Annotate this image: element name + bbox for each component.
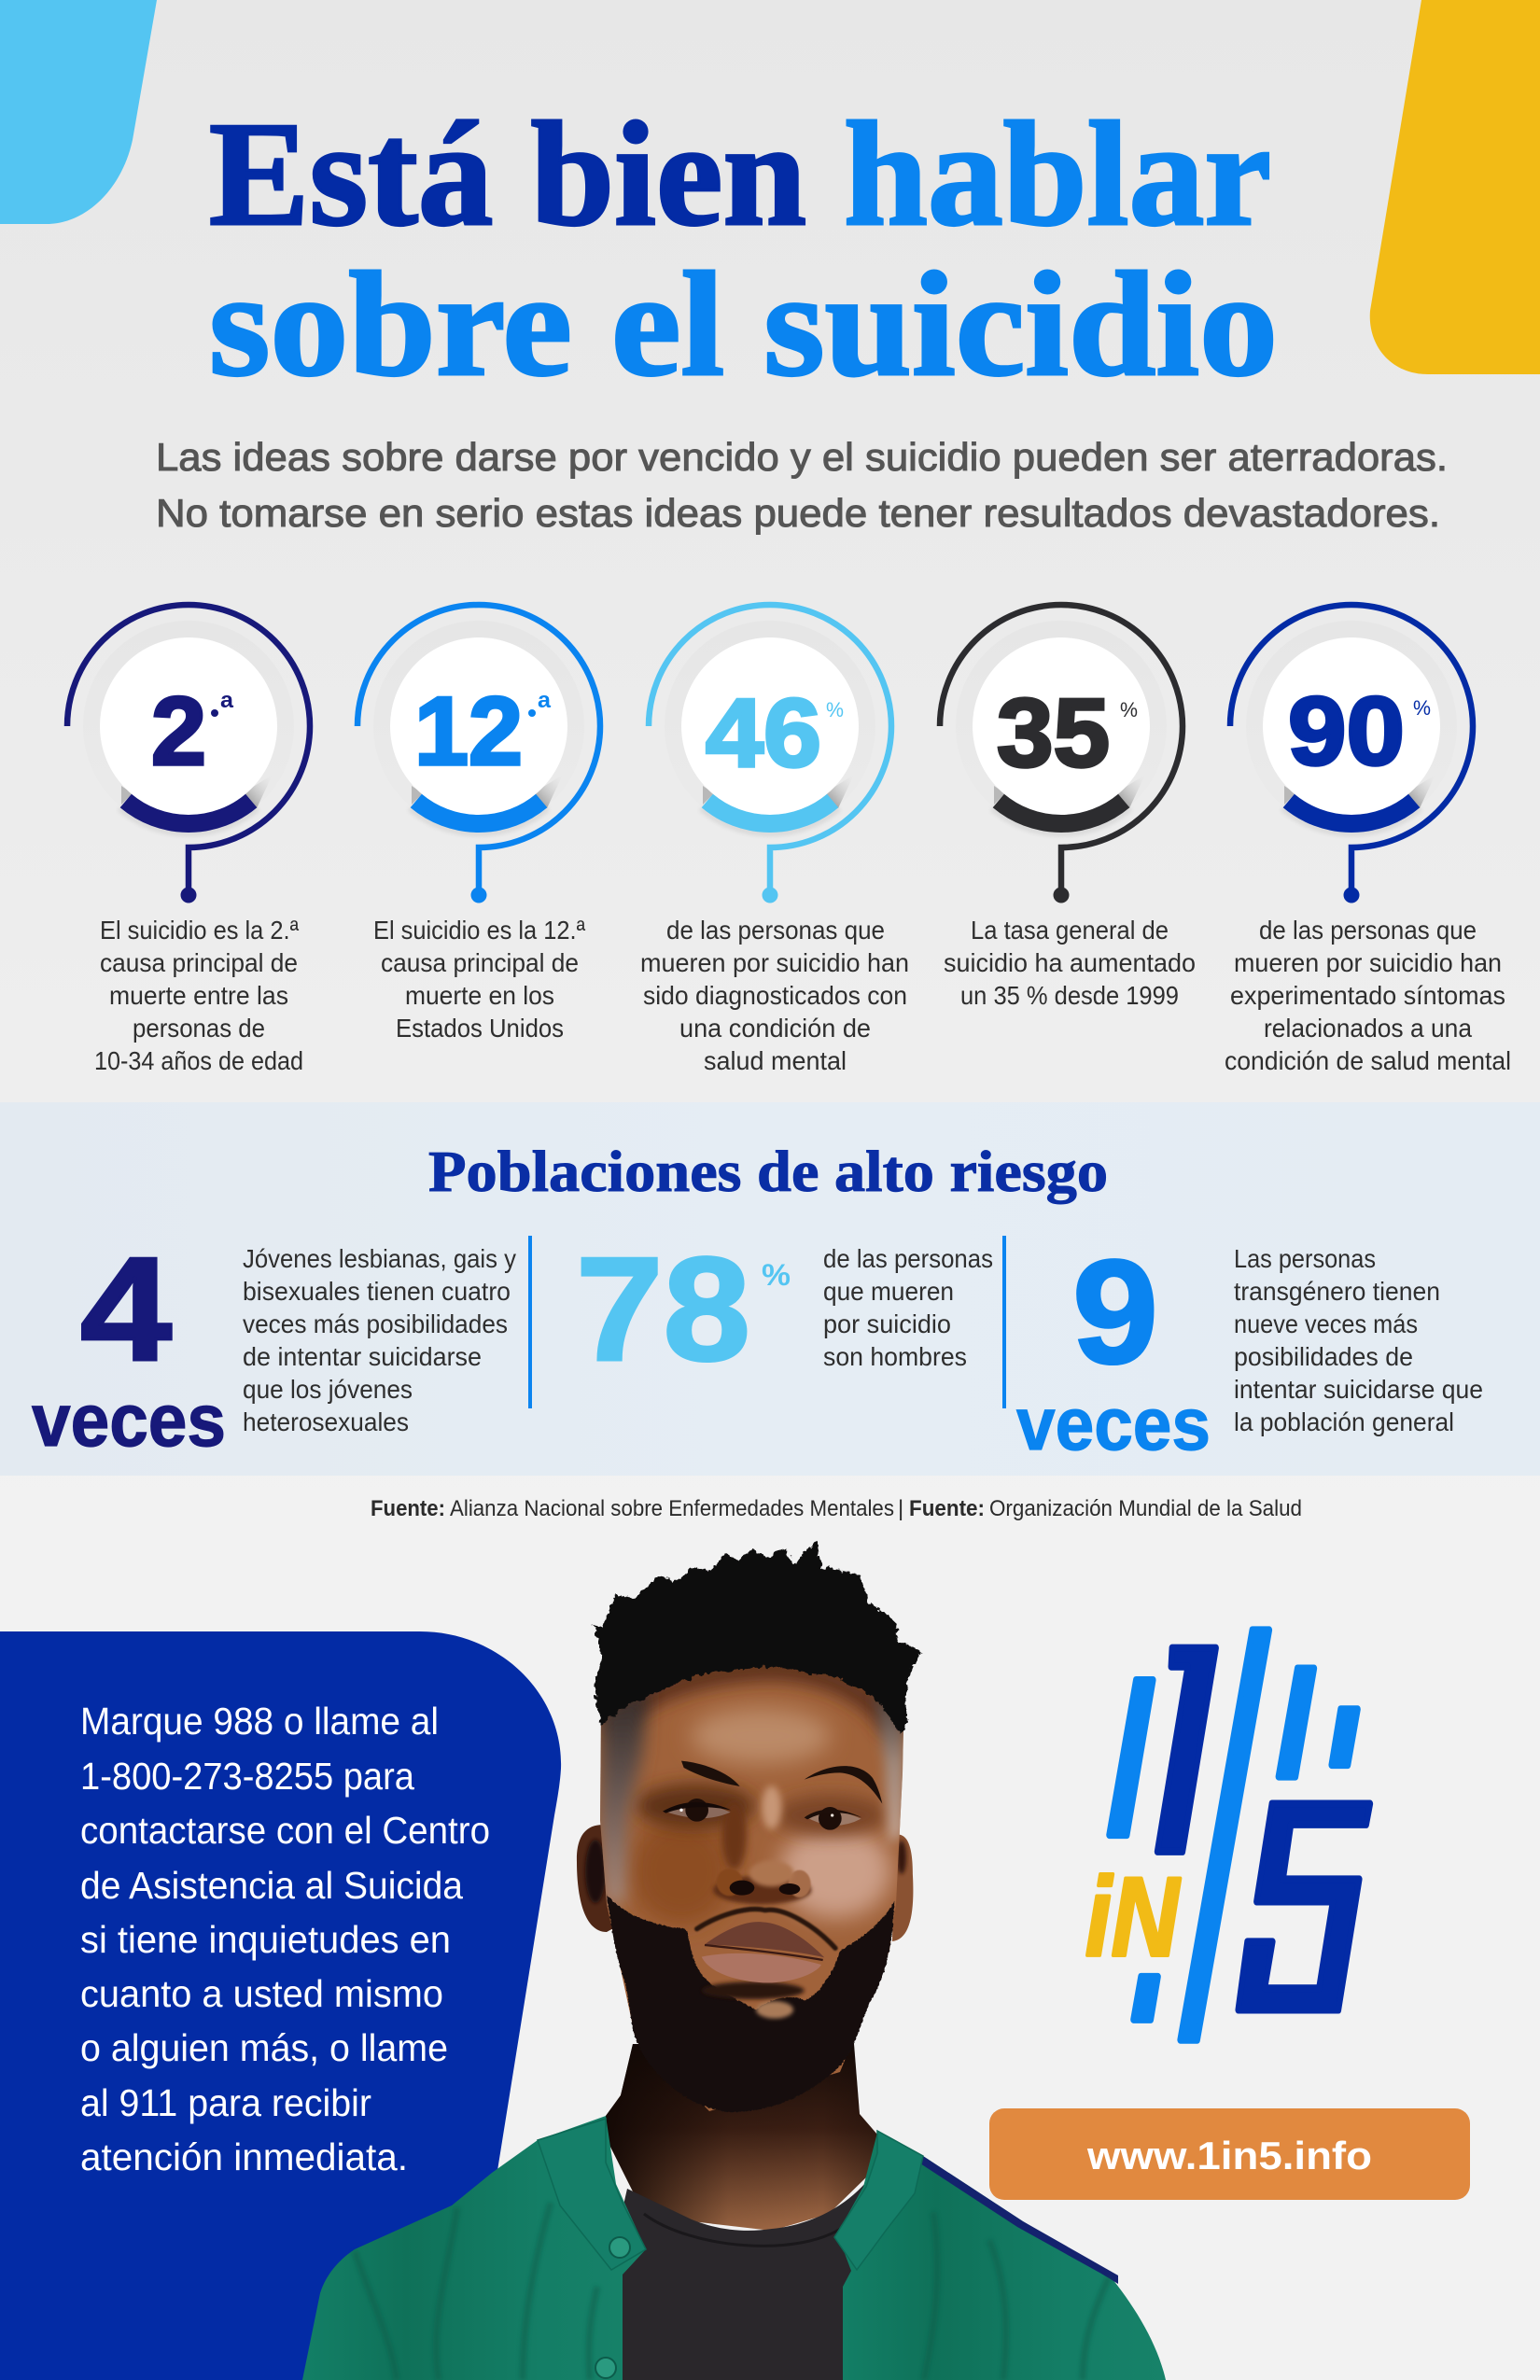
sources [371, 1496, 1302, 1521]
stat: 78 %: 78 [576, 1227, 750, 1392]
illustration: portrait of a man [302, 1543, 1166, 2380]
text: 9 veces [1234, 1244, 1483, 1436]
sources: | [898, 1496, 903, 1521]
gauge: 12.ª [357, 605, 600, 903]
caption: 35 %: La tasa general de [971, 916, 1169, 945]
sources: Fuente: [371, 1496, 445, 1521]
caption: 12.ª [373, 916, 586, 1043]
stat: 9 veces: veces [1016, 1382, 1211, 1465]
text: helpline: atención inmediata. [80, 2135, 408, 2178]
stat: 9 veces: 9 [1072, 1230, 1158, 1394]
text: 4 veces: bisexuales tienen cuatro [243, 1277, 511, 1306]
text: helpline: cuanto a usted mismo [80, 1972, 443, 2015]
head [600, 1665, 903, 2111]
subtitle [156, 435, 1448, 535]
stat: 2.ª [67, 605, 310, 1075]
stat: 12.ª [357, 605, 600, 1043]
jacket: right [837, 2133, 1166, 2380]
text: 4 veces: heterosexuales [243, 1407, 409, 1436]
text: 78 %: son hombres [823, 1342, 967, 1371]
caption: 90 %: mueren por suicidio han [1234, 948, 1502, 977]
caption: 46 % [640, 916, 909, 1075]
caption: 2.ª: muerte entre las [109, 981, 288, 1010]
ears [577, 1825, 913, 1941]
hair [593, 1543, 921, 1733]
stat: 90 % [1225, 605, 1511, 1075]
stat: 4 veces: 4 [80, 1227, 172, 1392]
eyebrows [681, 1761, 882, 1804]
number: 46 %: % [826, 698, 844, 721]
eyes [663, 1799, 861, 1830]
panel: high risk populations [0, 1102, 1540, 1476]
text: 78 %: de las personas [823, 1244, 993, 1273]
button: website: www.1in5.info [1086, 2134, 1372, 2177]
caption: 90 %: condición de salud mental [1225, 1046, 1511, 1075]
text: 78 %: por suicidio [823, 1309, 951, 1338]
subtitle: No tomarse en serio estas ideas puede tener resultados devastadores. [156, 491, 1440, 535]
caption: 35 %: un 35 % desde 1999 [960, 981, 1179, 1010]
caption: 12.ª: causa principal de [381, 948, 579, 977]
decoration: yellow corner shape [1370, 0, 1540, 374]
jacket collars [538, 2119, 923, 2270]
text: 4 veces [243, 1244, 516, 1436]
panel: helpline [0, 1631, 561, 2380]
caption: 2.ª [94, 916, 303, 1075]
text: helpline: 1-800-273-8255 para [80, 1755, 414, 1798]
caption: 46 %: mueren por suicidio han [640, 948, 909, 977]
number: 12.ª: a [538, 688, 552, 713]
caption: 2.ª: personas de [133, 1014, 265, 1043]
caption: 46 %: una condición de [679, 1014, 871, 1043]
caption: 12.ª: Estados Unidos [396, 1014, 564, 1043]
beard [607, 1895, 894, 2112]
gauge: 2.ª [67, 605, 310, 903]
t-shirt [611, 2182, 873, 2380]
text: helpline: o alguien más, o llame [80, 2026, 448, 2069]
number: 90 %: 90 [1288, 678, 1405, 786]
caption: 46 %: de las personas que [666, 916, 885, 945]
caption: 12.ª: El suicidio es la 12.ª [373, 916, 586, 945]
lips [697, 1909, 835, 1999]
number: 2.ª: 2 [151, 678, 206, 786]
text: helpline: contactarse con el Centro [80, 1809, 490, 1852]
sources: Organización Mundial de la Salud [989, 1496, 1302, 1521]
text: helpline: de Asistencia al Suicida [80, 1864, 463, 1907]
stat: 4 veces: veces [32, 1379, 226, 1462]
number: 12.ª: 12 [414, 678, 523, 786]
stat: 78 %: % [762, 1258, 791, 1292]
text: 4 veces: Jóvenes lesbianas, gais y [243, 1244, 516, 1273]
facial features [607, 1761, 894, 2112]
caption: 90 %: relacionados a una [1264, 1014, 1472, 1043]
text: 4 veces: de intentar suicidarse [243, 1342, 482, 1371]
title: hablar [844, 91, 1271, 257]
decoration: light blue corner shape [0, 0, 157, 224]
stat: 46 % [640, 605, 909, 1075]
text: 78 % [823, 1244, 993, 1371]
text: 9 veces: transgénero tienen [1234, 1277, 1440, 1306]
number: 35 %: % [1120, 698, 1138, 721]
number: 2.ª: a [220, 688, 234, 713]
gauge: 46 % [649, 605, 891, 903]
title: Está bien [209, 91, 806, 257]
number: 35 %: 35 [997, 679, 1110, 788]
sources: Fuente: [909, 1496, 985, 1521]
text: 78 %: que mueren [823, 1277, 954, 1306]
text: 9 veces: Las personas [1234, 1244, 1376, 1273]
gauge: 35 % [940, 605, 1183, 903]
text: helpline: al 911 para recibir [80, 2081, 371, 2124]
button: website [989, 2108, 1470, 2200]
text: 4 veces: que los jóvenes [243, 1375, 413, 1404]
caption: 90 %: experimentado síntomas [1230, 981, 1505, 1010]
text: 9 veces: posibilidades de [1234, 1342, 1413, 1371]
text: helpline [80, 1700, 490, 2178]
title: sobre el suicidio [209, 241, 1278, 407]
caption: 2.ª: causa principal de [100, 948, 298, 977]
jacket: left [302, 2116, 646, 2380]
logo: 1 in 5 [1085, 1630, 1370, 2040]
text: 9 veces: la población general [1234, 1407, 1454, 1436]
title [209, 91, 1278, 407]
caption: 2.ª: 10-34 años de edad [94, 1046, 303, 1075]
stat: 35 % [940, 605, 1196, 1010]
heading: high risk populations: Poblaciones de alto riesgo [428, 1141, 1108, 1204]
jacket buttons [595, 2237, 630, 2378]
caption: 35 %: suicidio ha aumentado [944, 948, 1196, 977]
text: helpline: si tiene inquietudes en [80, 1918, 451, 1961]
logo text: in: iN [1085, 1855, 1181, 1980]
number: 46 %: 46 [706, 679, 821, 788]
subtitle: Las ideas sobre darse por vencido y el suicidio pueden ser aterradoras. [156, 435, 1448, 479]
sources: Alianza Nacional sobre Enfermedades Mentales [450, 1496, 894, 1521]
text: 9 veces: nueve veces más [1234, 1309, 1418, 1338]
number: 2.ª [151, 678, 234, 786]
gauge: 90 % [1230, 605, 1473, 903]
caption: 46 %: salud mental [704, 1046, 847, 1075]
caption: 2.ª: El suicidio es la 2.ª [100, 916, 300, 945]
caption: 90 %: de las personas que [1259, 916, 1477, 945]
caption: 90 % [1225, 916, 1511, 1075]
number: 90 %: % [1413, 696, 1431, 720]
caption: 46 %: sido diagnosticados con [643, 981, 907, 1010]
text: 9 veces: intentar suicidarse que [1234, 1375, 1483, 1404]
neck [606, 2044, 877, 2231]
nose [713, 1785, 811, 1904]
stat: 4 veces [32, 1227, 226, 1462]
caption: 12.ª: muerte en los [405, 981, 554, 1010]
jacket folds [355, 2203, 1109, 2380]
text: helpline: Marque 988 o llame al [80, 1700, 439, 1743]
jacket shoulder stripe [920, 2156, 1118, 2284]
text: 4 veces: veces más posibilidades [243, 1309, 508, 1338]
caption: 35 % [944, 916, 1196, 1010]
stat: 9 veces [1016, 1230, 1211, 1465]
